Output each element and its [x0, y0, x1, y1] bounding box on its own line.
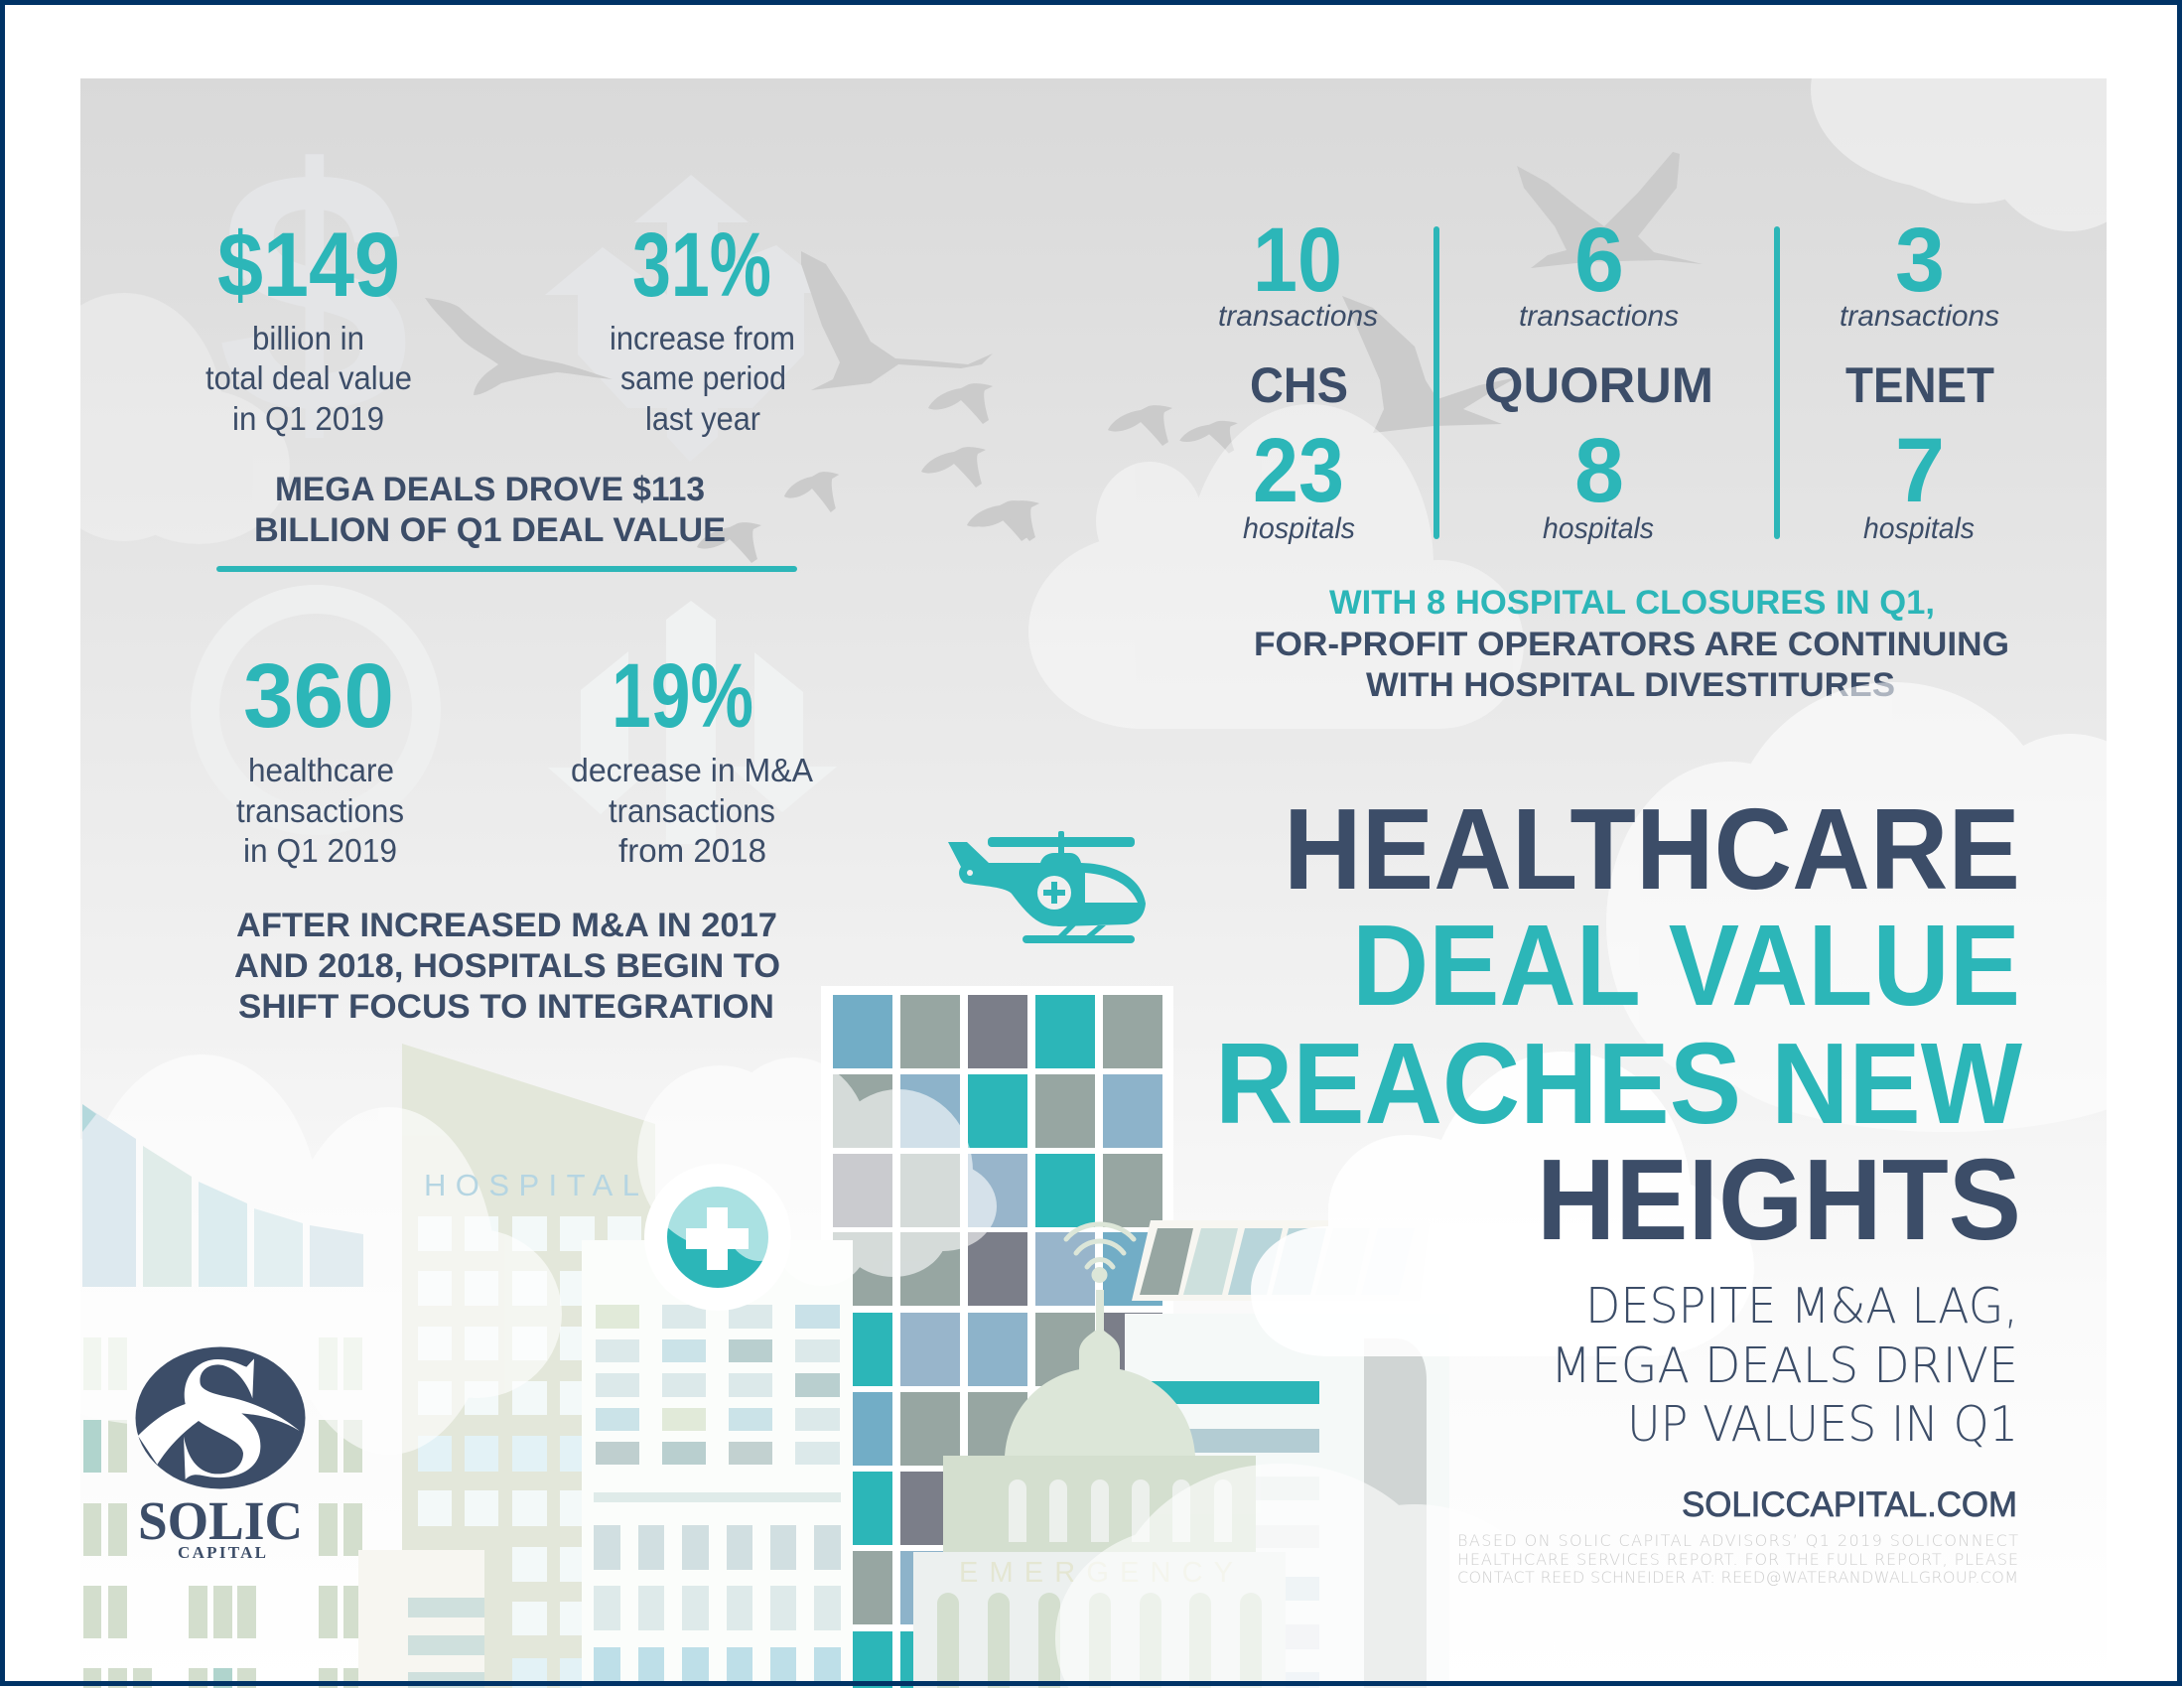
callout: integration: SHIFT FOCUS TO INTEGRATION — [238, 988, 774, 1026]
cloud: top right — [1811, 0, 2184, 231]
column: Tenet: hospitals — [1863, 512, 1975, 545]
front hospital building — [582, 1240, 853, 1688]
bird: goose 2 — [921, 447, 986, 488]
column: CHS: CHS — [1250, 357, 1348, 413]
column: Tenet — [1840, 210, 1999, 545]
column: Quorum — [1484, 210, 1713, 545]
stat: $149: total deal value — [205, 359, 412, 396]
callout: integration — [234, 907, 780, 1026]
subtitle: DESPITE M&A LAG, — [1585, 1278, 2018, 1335]
tower grid building — [821, 986, 1173, 1688]
callout: hospital closures — [1254, 584, 2009, 704]
cloud: bottom centre — [1055, 1464, 1555, 1688]
cloud: over tower — [637, 1057, 997, 1286]
stat: $149: in Q1 2019 — [232, 400, 384, 437]
back building windows — [418, 1216, 641, 1688]
stat: 19%: transactions — [609, 792, 775, 829]
stat: 31%: 31% — [632, 214, 771, 316]
stat: $149: $149 — [217, 214, 400, 316]
cloud: centre — [1028, 404, 1524, 729]
bird: lower crane — [1342, 296, 1517, 433]
subtitle — [1551, 1278, 2018, 1453]
stat: 360 — [236, 645, 404, 869]
column: Tenet: TENET — [1845, 357, 1994, 413]
title — [1215, 784, 2022, 1264]
stat: 31% — [610, 214, 795, 437]
icon: hospital plus badge — [644, 1164, 791, 1311]
icon: ring watermark — [191, 585, 441, 835]
icon: lower arrows watermark — [548, 601, 837, 844]
logo subline: CAPITAL — [178, 1543, 266, 1562]
back hospital building — [402, 1044, 655, 1688]
column: Quorum: hospitals — [1543, 512, 1654, 545]
column: CHS: 10 — [1253, 210, 1342, 311]
entrance columns — [937, 1593, 1262, 1688]
source note: HEALTHCARE SERVICES REPORT. FOR THE FULL REPORT, PLEASE — [1457, 1550, 2018, 1569]
bird: goose 7 — [1179, 421, 1238, 454]
callout: integration: AND 2018, HOSPITALS BEGIN TO — [234, 947, 780, 985]
website: SOLICCAPITAL.COM — [1682, 1485, 2017, 1524]
left building windows — [83, 1337, 362, 1688]
stat: 19%: decrease in M&A — [571, 752, 813, 788]
bird: goose 5 — [697, 522, 761, 563]
column: CHS — [1218, 210, 1378, 545]
cloud: in front of right building — [1251, 1052, 1754, 1356]
column: Quorum: transactions — [1519, 300, 1679, 333]
bird: goose 6 — [1108, 405, 1172, 446]
stat: $149: billion in — [252, 320, 364, 356]
column: CHS: 23 — [1253, 420, 1344, 521]
divider: Quorum and Tenet — [1774, 226, 1780, 539]
stat: 19% — [571, 645, 813, 869]
birds flock — [425, 152, 1703, 563]
column: Quorum: 8 — [1574, 420, 1624, 521]
bird: goose 8 — [975, 500, 1039, 541]
callout: mega deals — [216, 471, 797, 572]
solar panel strip — [1132, 1220, 1430, 1301]
cloud: behind title — [1606, 682, 2177, 1132]
cloud: bottom left — [0, 1055, 562, 1455]
column: CHS: hospitals — [1243, 512, 1355, 545]
dome pillars — [1009, 1479, 1232, 1542]
callout: mega deals: MEGA DEALS DROVE $113 — [275, 471, 705, 508]
callout: mega deals: BILLION OF Q1 DEAL VALUE — [254, 511, 726, 549]
left building glass bars — [82, 1104, 363, 1287]
emergency building — [913, 1267, 1286, 1688]
icon: dollar sign watermark: $ — [217, 98, 410, 487]
column: Quorum: QUORUM — [1484, 357, 1713, 413]
icon: helicopter — [948, 831, 1146, 943]
column: CHS: transactions — [1218, 300, 1378, 333]
bird: centre crane — [801, 251, 993, 390]
stat: 360: in Q1 2019 — [243, 832, 397, 869]
column: Tenet: 3 — [1895, 210, 1945, 311]
stat: 31%: increase from — [610, 320, 795, 356]
stat: 360: 360 — [243, 645, 394, 747]
right building — [1125, 1314, 1449, 1688]
callout: hospital closures: WITH HOSPITAL DIVESTITURES — [1366, 666, 1895, 704]
subtitle: UP VALUES IN Q1 — [1627, 1396, 2018, 1453]
title: REACHES NEW — [1215, 1019, 2022, 1148]
small cream building — [358, 1550, 484, 1688]
column: Quorum: 6 — [1574, 210, 1624, 311]
stat: 360: healthcare — [248, 752, 394, 788]
icon: badge cross — [686, 1207, 749, 1270]
stat: 31%: last year — [645, 400, 760, 437]
logo: Solic Capital — [135, 1346, 306, 1562]
divider: CHS and Quorum — [1433, 226, 1439, 539]
cloud: left — [0, 293, 290, 544]
icon: wifi signal — [1066, 1224, 1134, 1267]
icon: up arrows watermark — [545, 175, 836, 462]
bird: left crane — [425, 298, 613, 395]
stat: 19%: 19% — [612, 645, 753, 747]
logo wordmark: SOLIC — [138, 1490, 303, 1551]
bird: top crane — [1517, 152, 1703, 268]
column: Tenet: 7 — [1895, 420, 1945, 521]
title: DEAL VALUE — [1352, 901, 2020, 1030]
source note: BASED ON SOLIC CAPITAL ADVISORS’ Q1 2019 SOLICONNECT — [1457, 1531, 2018, 1550]
stat: 360: transactions — [236, 792, 404, 829]
title: HEIGHTS — [1537, 1135, 2021, 1264]
logo swoosh S — [138, 1358, 300, 1479]
hospital sign: HOSPITAL — [424, 1168, 639, 1202]
callout: hospital closures: FOR-PROFIT OPERATORS ARE CONTINUING — [1254, 626, 2009, 663]
bird: goose 4 — [967, 500, 1031, 541]
subtitle: MEGA DEALS DRIVE — [1551, 1337, 2018, 1394]
stat: 31%: same period — [620, 359, 786, 396]
stat: $149 — [205, 214, 412, 437]
column: Tenet: transactions — [1840, 300, 1999, 333]
source note: CONTACT REED SCHNEIDER AT: REED@WATERANDWALLGROUP.COM — [1457, 1568, 2018, 1587]
front building windows — [594, 1305, 841, 1502]
callout: hospital closures: WITH 8 HOSPITAL CLOSURES IN Q1, — [1329, 584, 1935, 622]
title: HEALTHCARE — [1284, 784, 2020, 914]
source note — [1457, 1531, 2018, 1587]
bird: goose 3 — [784, 472, 839, 512]
callout: integration: AFTER INCREASED M&A IN 2017 — [236, 907, 777, 944]
bird: goose 1 — [928, 383, 993, 424]
emergency sign: EMERGENCY — [959, 1557, 1233, 1589]
stat: 19%: from 2018 — [618, 832, 766, 869]
